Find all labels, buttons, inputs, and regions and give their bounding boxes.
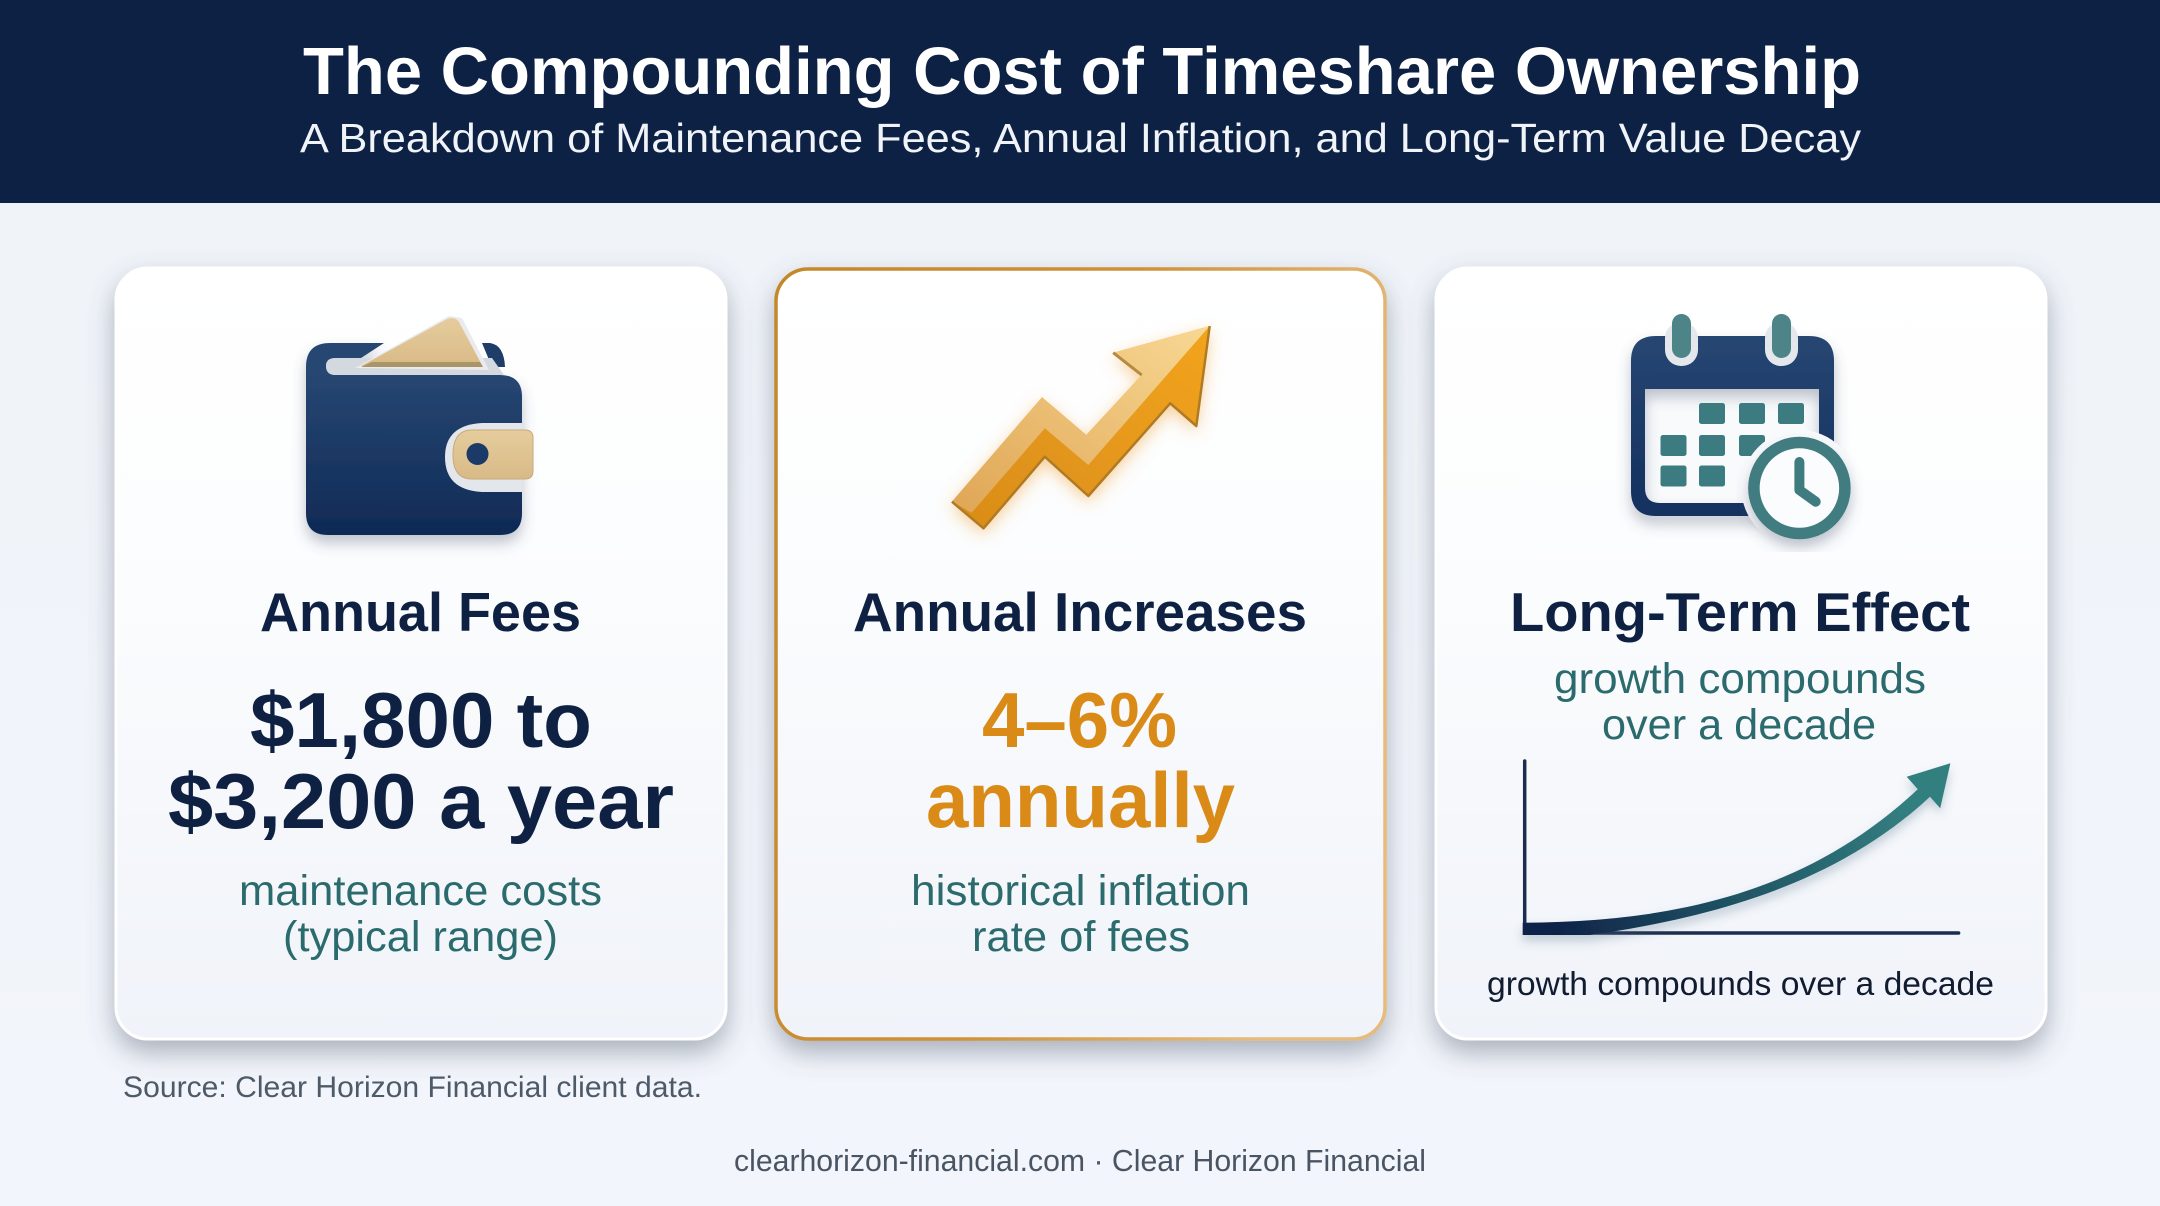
stat: 4-6% annually: annually [926, 756, 1235, 844]
stat: fee range: $1,800 to [250, 676, 592, 764]
panel: annual fees [116, 268, 726, 1039]
description: inflation rate: rate of fees [972, 913, 1190, 961]
stat: 4-6% annually: 4–6% [982, 676, 1177, 764]
description: growth compounds: over a decade [1602, 701, 1876, 749]
description: maintenance costs: maintenance costs [239, 867, 602, 915]
chart caption: growth compounds over a decade [1487, 965, 1994, 1002]
panel: annual increases [776, 269, 1385, 1039]
stat: fee range [168, 676, 674, 845]
description: inflation rate: historical inflation [911, 867, 1250, 915]
source note: Source: Clear Horizon Financial client data. [123, 1071, 702, 1104]
header band [0, 0, 2160, 203]
icon: rising arrow [952, 326, 1210, 528]
heading: annual fees: Annual Fees [260, 581, 581, 643]
subtitle: A Breakdown of Maintenance Fees, Annual Inflation, and Long-Term Value Decay [300, 115, 1862, 161]
description: growth compounds: growth compounds [1554, 655, 1926, 703]
stat: fee range: $3,200 a year [168, 757, 674, 845]
icon: wallet [306, 316, 533, 535]
panel: long-term effect [1436, 268, 2046, 1039]
icon: calendar with clock [1631, 314, 1857, 546]
chart: exponential growth curve [1523, 761, 1959, 935]
description: inflation rate [911, 867, 1250, 961]
stat: 4-6% annually [926, 676, 1235, 844]
description: maintenance costs [239, 867, 602, 961]
heading: annual increases: Annual Increases [853, 581, 1307, 643]
description: maintenance costs: (typical range) [283, 913, 558, 961]
footer: clearhorizon-financial.com · Clear Horizon Financial [734, 1144, 1426, 1178]
heading: long-term effect: Long-Term Effect [1510, 581, 1970, 643]
title: The Compounding Cost of Timeshare Ownership [303, 34, 1861, 109]
description: growth compounds [1554, 655, 1926, 749]
